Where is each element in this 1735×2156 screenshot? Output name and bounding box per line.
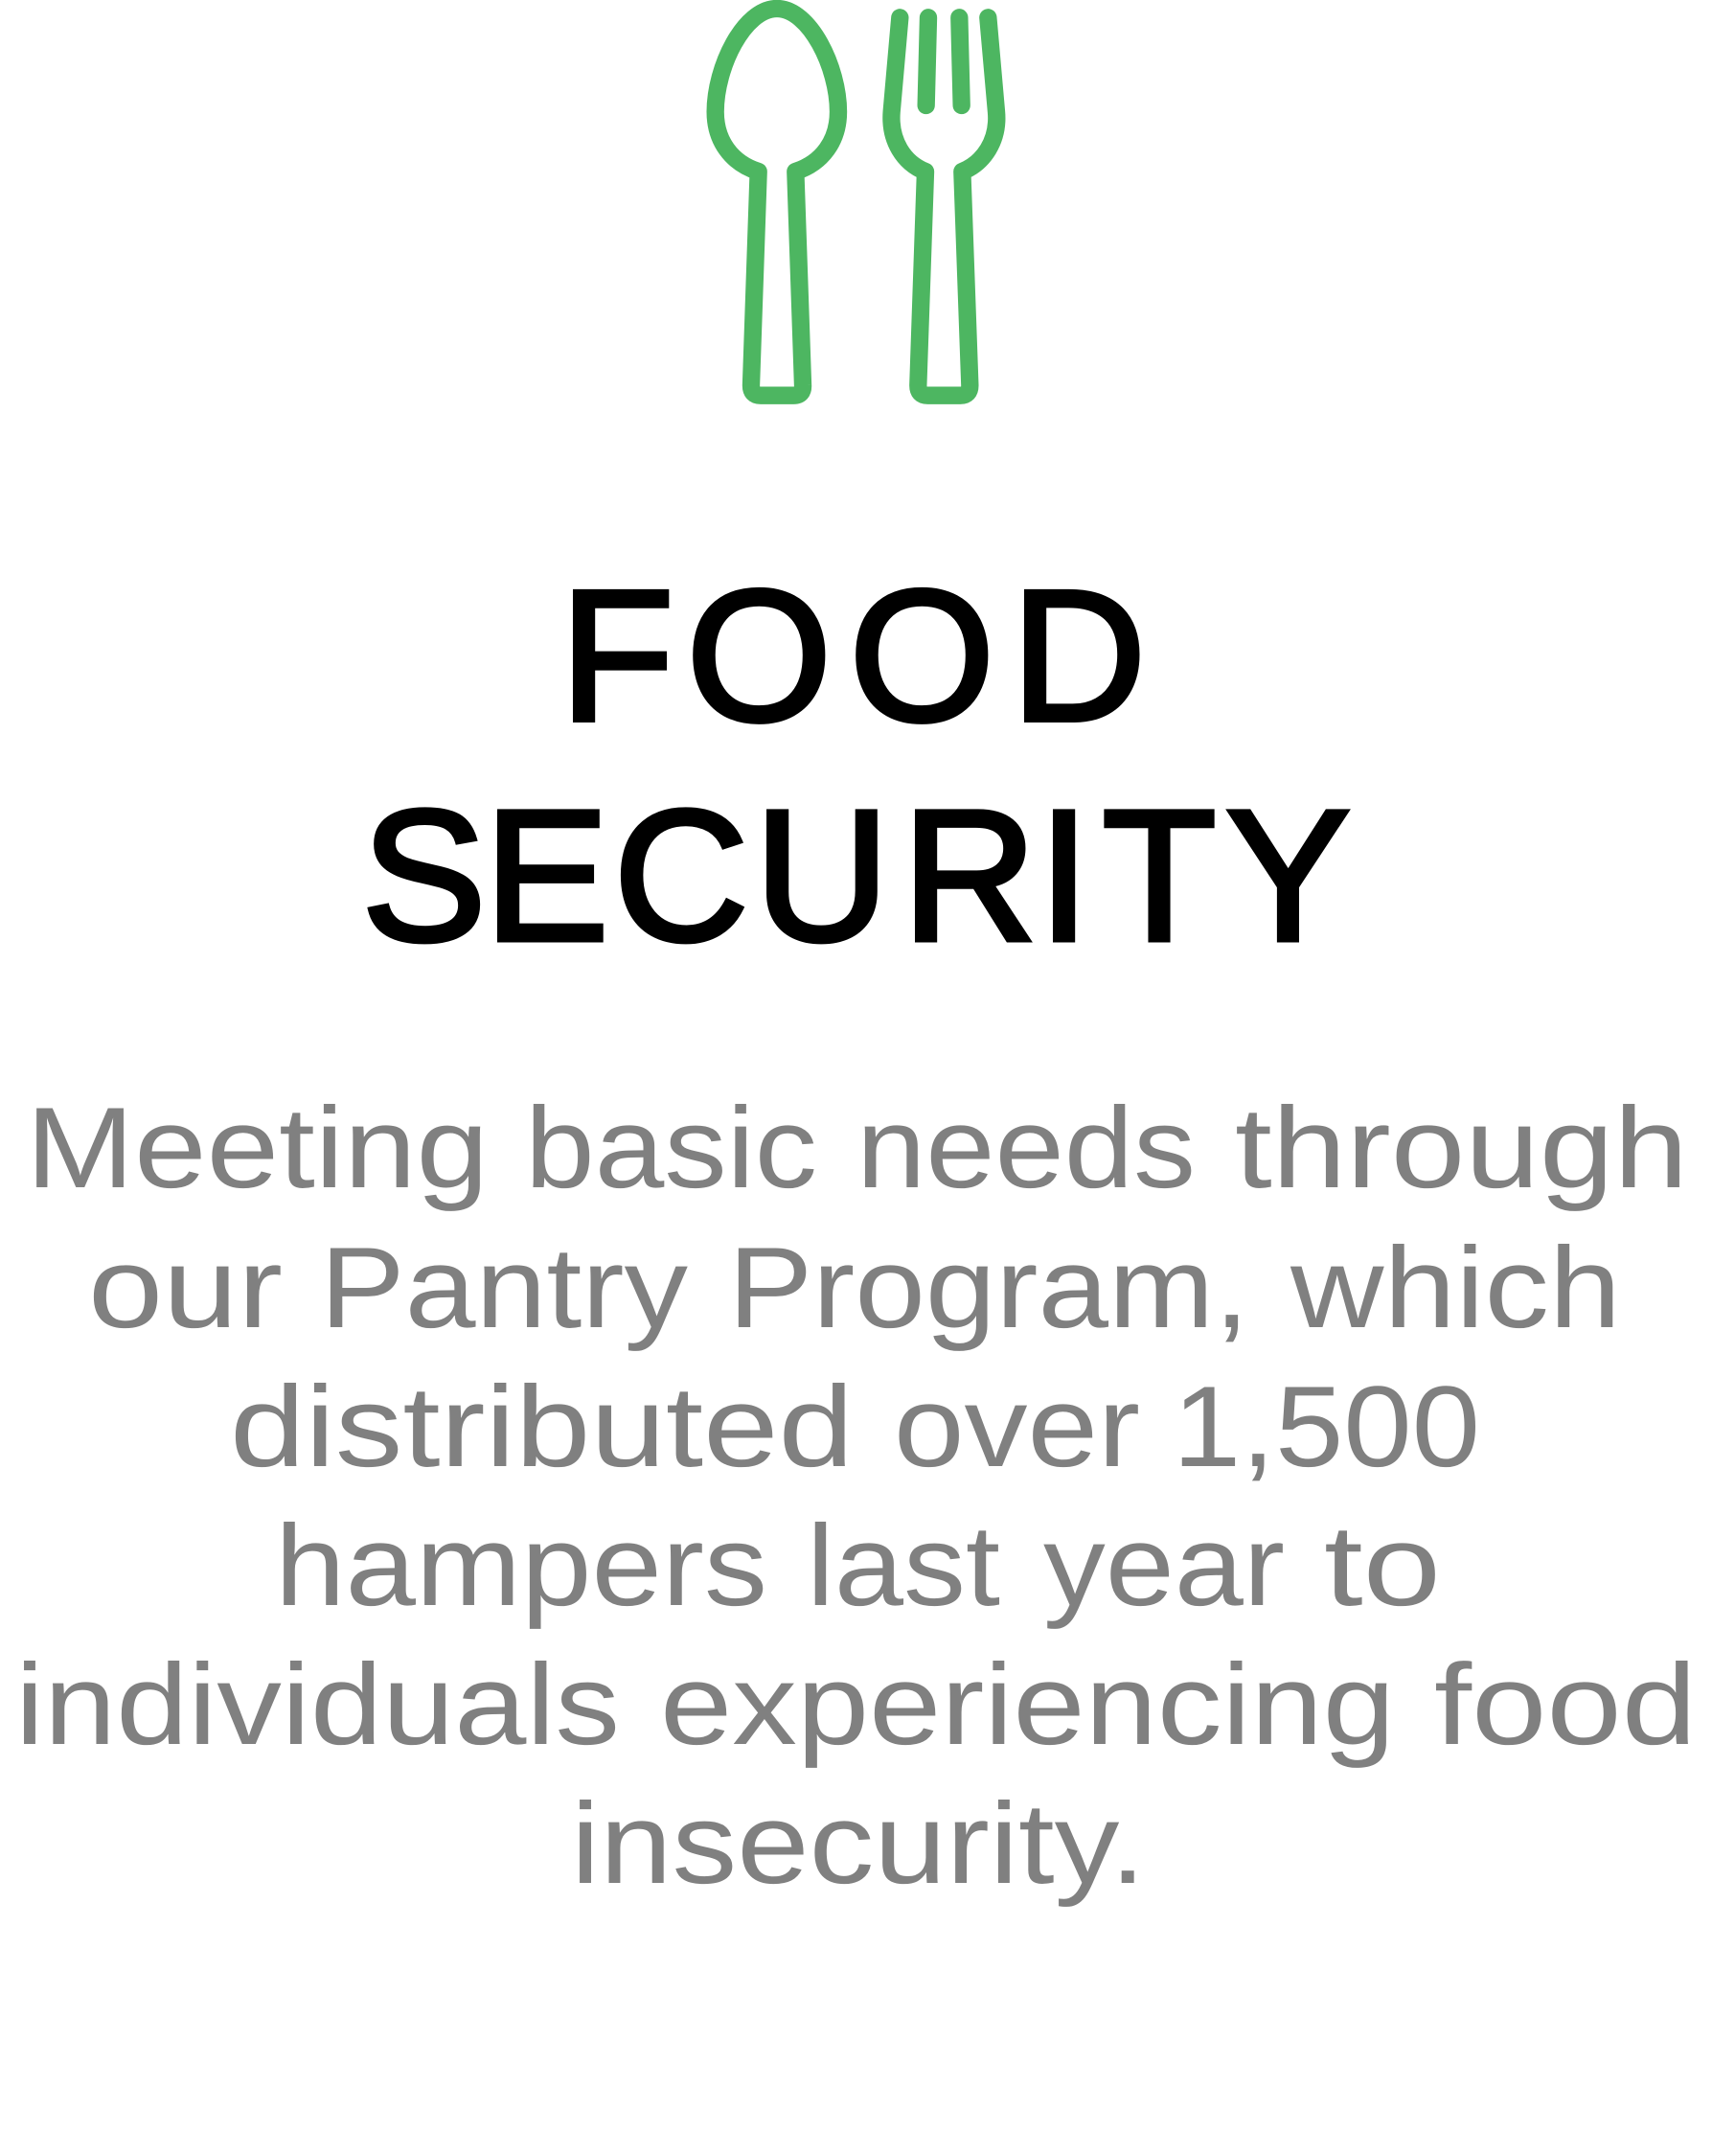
body text: pantry program description: Pantry <box>320 1224 688 1352</box>
body text: pantry program description: through <box>1235 1084 1688 1212</box>
body text: pantry program description: distributed <box>230 1363 854 1491</box>
body text: pantry program description: hampers <box>275 1502 767 1630</box>
heading: food security: FOOD <box>559 552 1146 761</box>
icon: spoon <box>716 9 838 396</box>
icon: fork <box>891 17 996 396</box>
heading: food security: SECURITY <box>362 771 1351 980</box>
body text: pantry program description: experiencing <box>660 1640 1395 1769</box>
body text: pantry program description: food <box>1434 1640 1697 1769</box>
body text: pantry program description: 1,500 <box>1173 1363 1480 1491</box>
body text: pantry program description: over <box>894 1363 1140 1491</box>
body text: pantry program description: needs <box>856 1084 1196 1212</box>
body text: pantry program description <box>15 1084 1697 1908</box>
heading: food security <box>362 552 1351 980</box>
body text: pantry program description: basic <box>525 1084 817 1212</box>
body text: pantry program description: year <box>1043 1502 1285 1630</box>
body text: pantry program description: insecurity. <box>571 1779 1146 1908</box>
body text: pantry program description: last <box>807 1502 1000 1630</box>
body text: pantry program description: to <box>1324 1502 1441 1630</box>
body text: pantry program description: Program, <box>728 1224 1249 1352</box>
body text: pantry program description: our <box>88 1224 283 1352</box>
body text: pantry program description: individuals <box>15 1640 620 1769</box>
body text: pantry program description: Meeting <box>26 1084 489 1212</box>
icon: spoon and fork <box>716 9 996 396</box>
body text: pantry program description: which <box>1290 1224 1621 1352</box>
